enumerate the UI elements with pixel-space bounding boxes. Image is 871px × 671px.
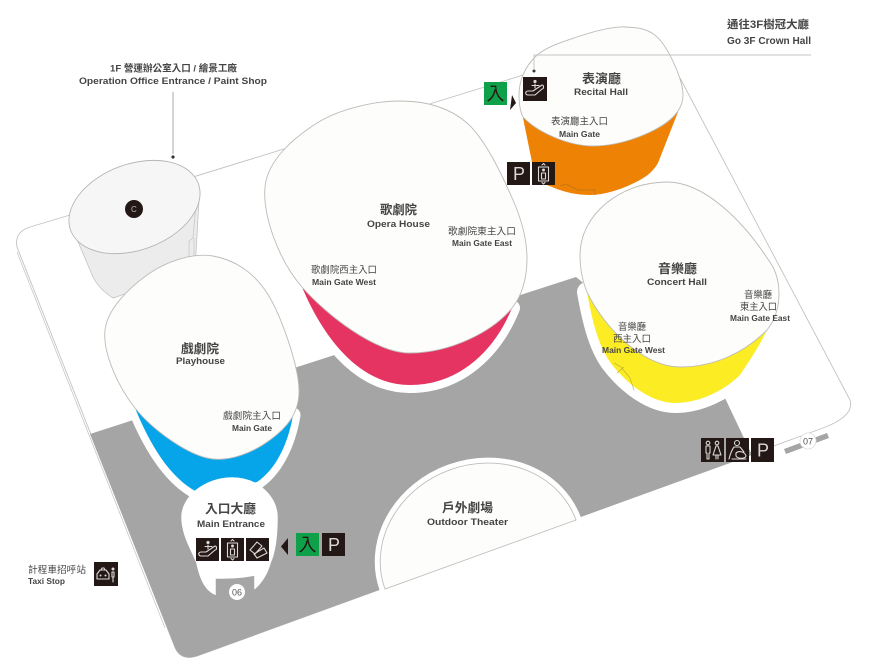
recital hall [519,27,683,195]
icon: entry, recital hall [484,82,507,105]
playhouse: 戲劇院主入口 [223,410,281,422]
playhouse: 戲劇院 [181,341,219,356]
callout: operation office entrance: Operation Office Entrance / Paint Shop [79,76,267,87]
callout: operation office entrance [79,62,267,159]
icon: parking, main entrance [322,533,345,556]
opera house: Opera House [367,219,430,230]
concert hall: 東主入口 [740,301,777,313]
icon: elevator, recital hall [532,162,555,185]
recital hall: 表演廳 [582,71,622,86]
marker C: C [131,205,137,214]
outdoor theater: 戶外劇場 [442,500,493,515]
icon: escalator, recital hall [523,77,547,101]
playhouse: Playhouse [176,356,225,367]
recital hall: Main Gate [559,130,601,139]
label: go 3F crown hall [727,17,811,47]
gate 07 road marker: 07 [803,436,813,446]
icon: elevator, main entrance [221,538,244,561]
concert hall: Main Gate East [730,314,790,323]
label: go 3F crown hall: 通往3F樹冠大廳 [727,17,809,31]
opera house [265,101,527,385]
recital hall: 表演廳主入口 [551,116,608,128]
icon: nursing room [726,438,749,462]
taxi stop: 計程車招呼站 [28,564,86,576]
icon: entry, main entrance [296,533,319,556]
icon: entry, recital hall: 入 [486,84,504,104]
opera house: 歌劇院西主入口 [311,264,377,276]
gray plaza ground [90,277,752,657]
callout: operation office entrance: 1F 營運辦公室入口 / 繪景工廠 [110,62,237,74]
concert hall: Concert Hall [647,277,707,288]
leader line: go to 3F crown hall [532,55,811,72]
concert hall: Main Gate West [602,346,665,355]
marker 06: 06 [232,588,242,598]
concert hall: 音樂廳 [658,261,698,276]
concert hall: 西主入口 [613,333,651,345]
playhouse: Main Gate [232,424,273,433]
outdoor theater [380,463,576,589]
opera house: 歌劇院東主入口 [448,226,516,238]
icon: parking, main entrance: P [328,535,340,555]
arrow: entrance pointing left [281,538,288,555]
icon: parking, recital hall [507,162,530,185]
taxi stop: Taxi Stop [28,577,65,586]
main entrance [182,478,277,600]
building C cylinder [56,143,213,298]
icon: parking, recital hall: P [513,164,525,184]
arrow: recital entry pointing right [510,95,516,110]
icon: restrooms [701,438,724,462]
icon: entry, main entrance: 入 [298,535,316,555]
gate 07 road marker [784,433,829,454]
recital hall: Recital Hall [574,87,628,98]
opera house: Main Gate West [312,278,376,287]
icon: parking, east side [751,438,774,462]
concert hall: 音樂廳 [744,289,772,301]
main entrance: 入口大廳 [205,501,256,516]
label: go 3F crown hall: Go 3F Crown Hall [727,36,811,47]
playhouse [105,255,299,492]
main entrance: Main Entrance [197,519,265,530]
icon: tickets, main entrance [246,538,269,561]
taxi stop [28,562,118,586]
icon: taxi [94,562,118,586]
opera house: Main Gate East [452,239,512,248]
marker C [125,200,143,218]
concert hall [580,182,790,403]
outdoor theater: Outdoor Theater [427,517,508,528]
concert hall: 音樂廳 [618,321,646,333]
icon: parking, east side: P [757,440,769,460]
opera house: 歌劇院 [380,202,417,217]
icon: escalator, main entrance [196,538,219,561]
